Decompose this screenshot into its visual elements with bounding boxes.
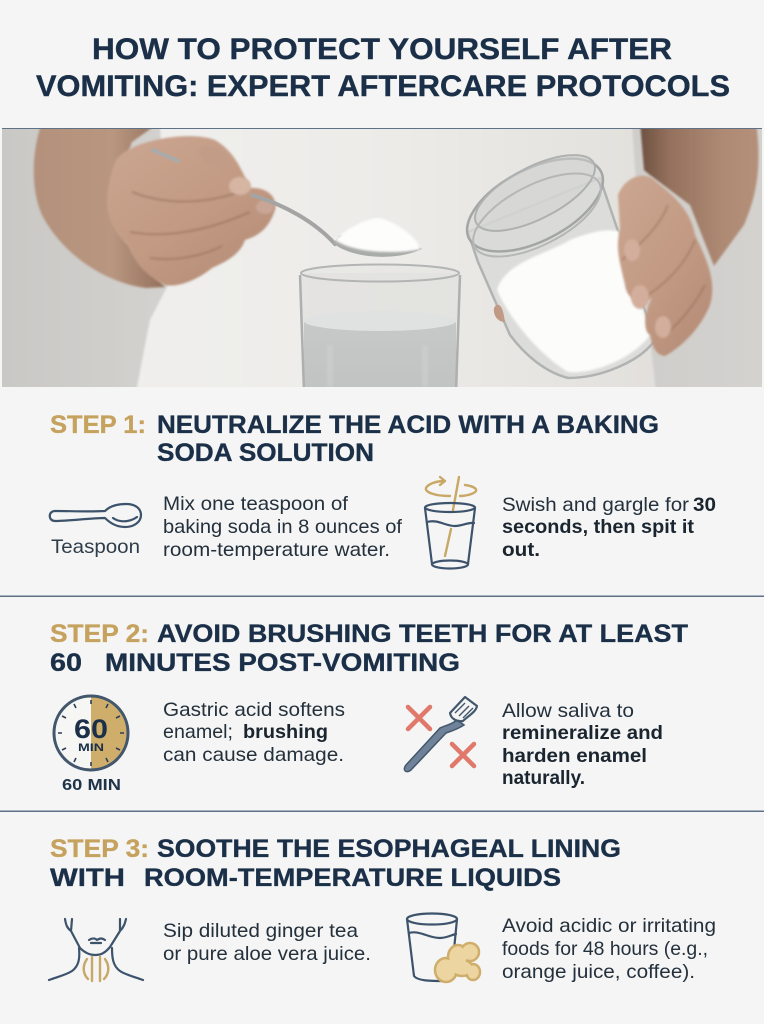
text: swish and gargle: Swish and gargle for <box>502 494 690 516</box>
icon: 60 minute timer <box>54 696 128 794</box>
shirt <box>136 125 656 392</box>
icon: glass with ginger root <box>407 914 480 982</box>
text: swish and gargle <box>502 494 716 561</box>
step 1 heading: STEP 1: <box>50 411 146 439</box>
step 3 heading <box>50 835 621 892</box>
icon: glass with swirling straw <box>425 477 476 568</box>
text: swish and gargle: 30 <box>693 494 716 516</box>
text: mix baking soda <box>163 493 403 561</box>
text: allow saliva <box>502 700 663 789</box>
step 1 heading: SODA SOLUTION <box>157 439 374 467</box>
title <box>36 33 730 103</box>
glass of water <box>300 264 460 392</box>
text: mix baking soda: Mix one teaspoon of <box>163 493 349 515</box>
jar of baking soda <box>466 154 653 380</box>
step 1 heading: NEUTRALIZE THE ACID WITH A BAKING <box>157 411 659 439</box>
text: sip ginger tea <box>163 920 371 965</box>
text: allow saliva: harden enamel <box>502 745 647 767</box>
text: sip ginger tea: or pure aloe vera juice. <box>163 943 371 965</box>
text: avoid acidic foods <box>502 915 716 983</box>
photo: hands adding baking soda to a glass of water <box>2 122 762 392</box>
text: sip ginger tea: Sip diluted ginger tea <box>163 920 358 942</box>
step 2 heading: MINUTES POST-VOMITING <box>105 649 460 677</box>
icon: teaspoon: Teaspoon <box>51 536 140 558</box>
text: gastric acid: can cause damage. <box>163 744 344 766</box>
step 3 heading: WITH <box>50 864 125 892</box>
step 3 heading: ROOM-TEMPERATURE LIQUIDS <box>144 864 561 892</box>
text: swish and gargle: out. <box>502 539 540 561</box>
step 2 heading <box>50 620 688 677</box>
text: allow saliva: remineralize and <box>502 722 663 744</box>
icon: teaspoon <box>50 504 141 558</box>
icon: 60 minute timer: 60 MIN <box>62 777 121 794</box>
text: gastric acid <box>163 699 345 766</box>
text: gastric acid: Gastric acid softens <box>163 699 345 721</box>
text: allow saliva: Allow saliva to <box>502 700 634 722</box>
text: avoid acidic foods: orange juice, coffee). <box>502 961 695 983</box>
step 2 heading: 60 <box>50 649 82 677</box>
step 2 heading: STEP 2: <box>50 620 149 648</box>
step 2 heading: AVOID BRUSHING TEETH FOR AT LEAST <box>157 620 688 648</box>
text: swish and gargle: seconds, then spit it <box>502 516 695 538</box>
title: HOW TO PROTECT YOURSELF AFTER <box>92 33 672 66</box>
spoon <box>153 150 422 257</box>
step 3 heading: SOOTHE THE ESOPHAGEAL LINING <box>157 835 621 863</box>
icon: crossed-out toothbrush <box>404 697 477 772</box>
right hand holding jar <box>494 176 712 356</box>
text: avoid acidic foods: Avoid acidic or irritating <box>502 915 716 937</box>
text: gastric acid: brushing <box>243 721 328 743</box>
icon: 60 minute timer: 60 <box>74 714 108 744</box>
text: allow saliva: naturally. <box>502 767 585 789</box>
text: mix baking soda: room-temperature water. <box>163 539 390 561</box>
step 3 heading: STEP 3: <box>50 835 149 863</box>
text: avoid acidic foods: foods for 48 hours (e.g., <box>502 938 708 960</box>
left hand holding spoon <box>107 136 276 286</box>
step 1 heading <box>50 411 659 467</box>
text: mix baking soda: baking soda in 8 ounces of <box>163 516 403 538</box>
title: VOMITING: EXPERT AFTERCARE PROTOCOLS <box>36 70 730 103</box>
icon: 60 minute timer: MIN <box>78 742 104 754</box>
left arm <box>34 122 165 288</box>
text: gastric acid: enamel; <box>163 721 233 743</box>
right arm <box>640 122 759 266</box>
icon: throat and esophagus <box>49 919 143 981</box>
